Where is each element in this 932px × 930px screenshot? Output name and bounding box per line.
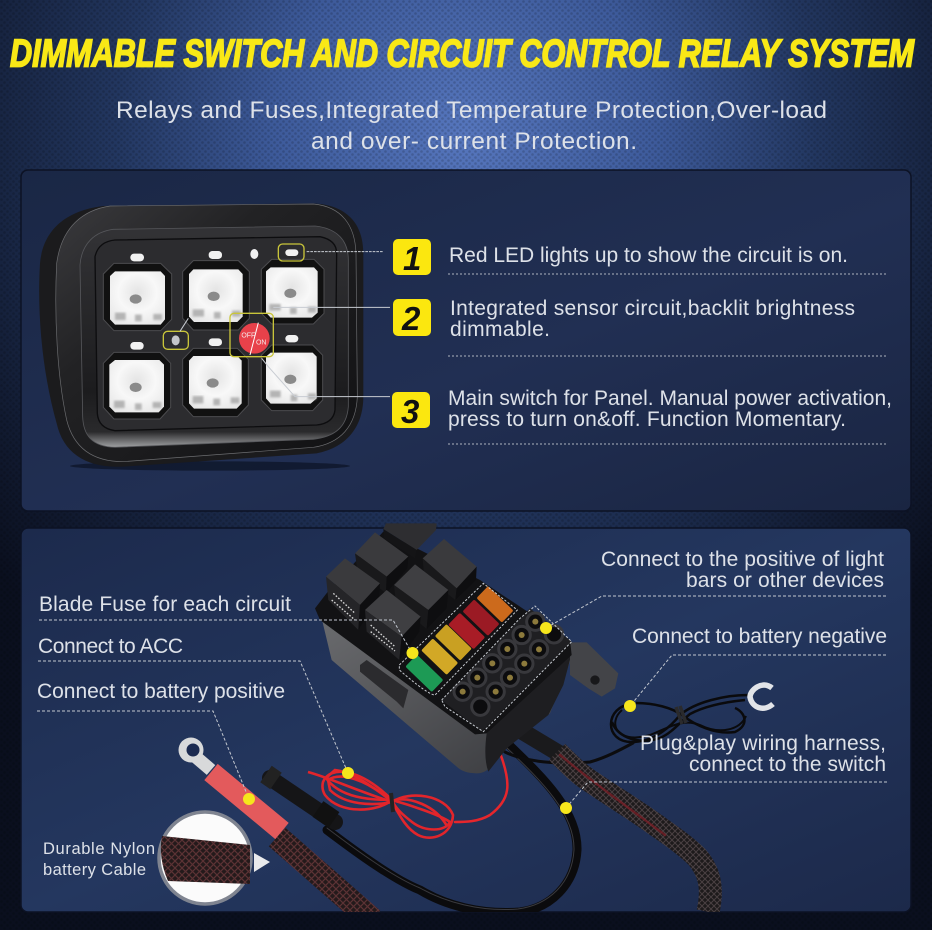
main power button [239, 323, 270, 355]
relay fuse box [315, 523, 618, 773]
panel: relay box and wiring [21, 523, 911, 920]
callout 1 [393, 239, 888, 277]
blade fuses [405, 586, 513, 692]
callout 2: Integrated sensor circuit,backlit brightness [450, 297, 855, 320]
label: battery positive: Connect to battery positive [37, 680, 285, 703]
button 4 [103, 352, 171, 419]
label: positive of light bars: bars or other devices [686, 569, 884, 592]
callout 2 [393, 297, 888, 356]
callout 2: dimmable. [450, 318, 550, 341]
button 5 [183, 348, 248, 417]
wire tie [391, 793, 393, 812]
callout 3: 3 [401, 393, 419, 430]
subtitle: and over- current Protection. [311, 128, 637, 155]
icon: switch panel device [39, 203, 390, 471]
highlight outlines [163, 244, 304, 357]
mounting bracket [570, 642, 618, 697]
button 3 [261, 259, 324, 324]
magnifier: nylon detail [43, 812, 270, 904]
dashed zone outlines [399, 583, 572, 732]
label: positive of light bars: Connect to the positive of light [601, 548, 884, 571]
label: positive of light bars [601, 548, 884, 592]
magnifier: nylon detail: Durable Nylon [43, 840, 155, 858]
button 1 [103, 263, 172, 331]
wiring harness [327, 730, 710, 913]
battery cable with ring terminal [178, 738, 372, 920]
subtitle: Relays and Fuses,Integrated Temperature Protection,Over-load [116, 97, 827, 124]
callout 2: 2 [401, 300, 421, 337]
relays [326, 523, 477, 660]
callout 3: Main switch for Panel. Manual power activation, [448, 387, 892, 410]
red wire coil [308, 770, 453, 838]
subtitle [116, 97, 827, 155]
fork terminal [750, 685, 773, 708]
status LEDs [130, 249, 298, 350]
black wire with fork terminal [611, 685, 773, 742]
label: battery negative: Connect to battery negative [632, 625, 887, 648]
label: ACC: Connect to ACC [38, 635, 183, 658]
label: wiring harness: connect to the switch [689, 753, 886, 776]
callout 1: Red LED lights up to show the circuit is on. [449, 244, 848, 267]
button 2 [183, 261, 249, 330]
leader lines [37, 596, 887, 808]
callout 1: 1 [403, 240, 421, 277]
callout 3: press to turn on&off. Function Momentary. [448, 408, 846, 431]
waterproof connector [266, 774, 335, 822]
label: blade fuse: Blade Fuse for each circuit [39, 593, 291, 616]
label: wiring harness [640, 732, 886, 776]
callout 3 [392, 387, 892, 444]
button 6 [261, 345, 323, 411]
main power button: ON [256, 339, 266, 346]
yellow markers [243, 622, 636, 814]
leader lines [180, 252, 390, 397]
label: wiring harness: Plug&play wiring harness, [640, 732, 886, 755]
terminal block [442, 608, 572, 732]
panel: switch panel features [21, 170, 911, 511]
main power button: OFF [241, 332, 255, 339]
magnifier: nylon detail: battery Cable [43, 861, 146, 879]
